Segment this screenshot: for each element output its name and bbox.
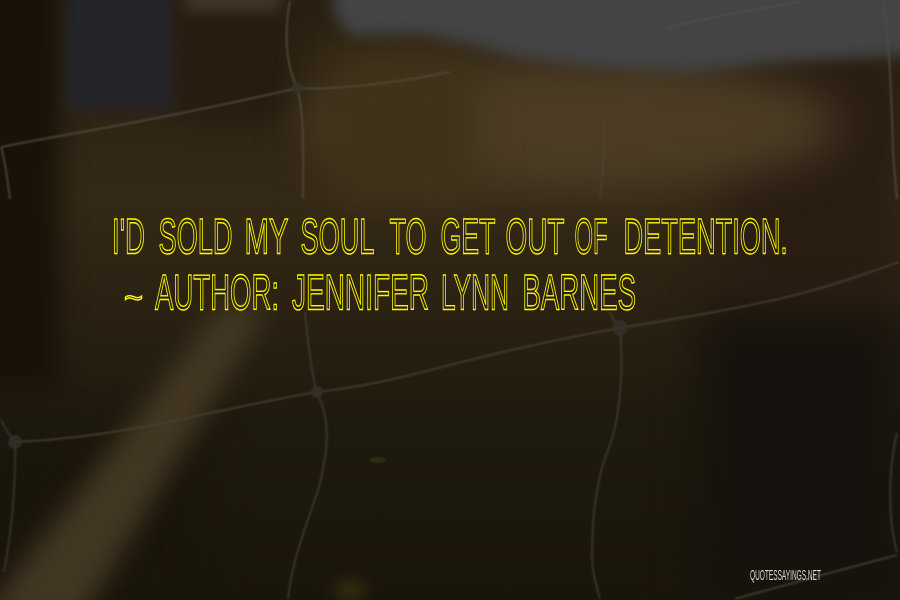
quote text: SOUL (300, 207, 374, 264)
author attribution: AUTHOR: (155, 263, 279, 320)
quote text: . (780, 207, 788, 264)
quote text: MY (244, 207, 288, 264)
quote text: I'D (112, 207, 145, 264)
author attribution: BARNES (522, 263, 636, 320)
quote text: OF (574, 207, 608, 264)
quote text: TO (390, 207, 426, 264)
author attribution: ~ (124, 279, 143, 317)
net knots (8, 82, 628, 449)
quote text: OUT (506, 207, 564, 264)
author attribution: LYNN (441, 263, 509, 320)
author attribution: JENNIFER (292, 263, 429, 320)
quote text: SOLD (158, 207, 232, 264)
quote text: GET (440, 207, 496, 264)
